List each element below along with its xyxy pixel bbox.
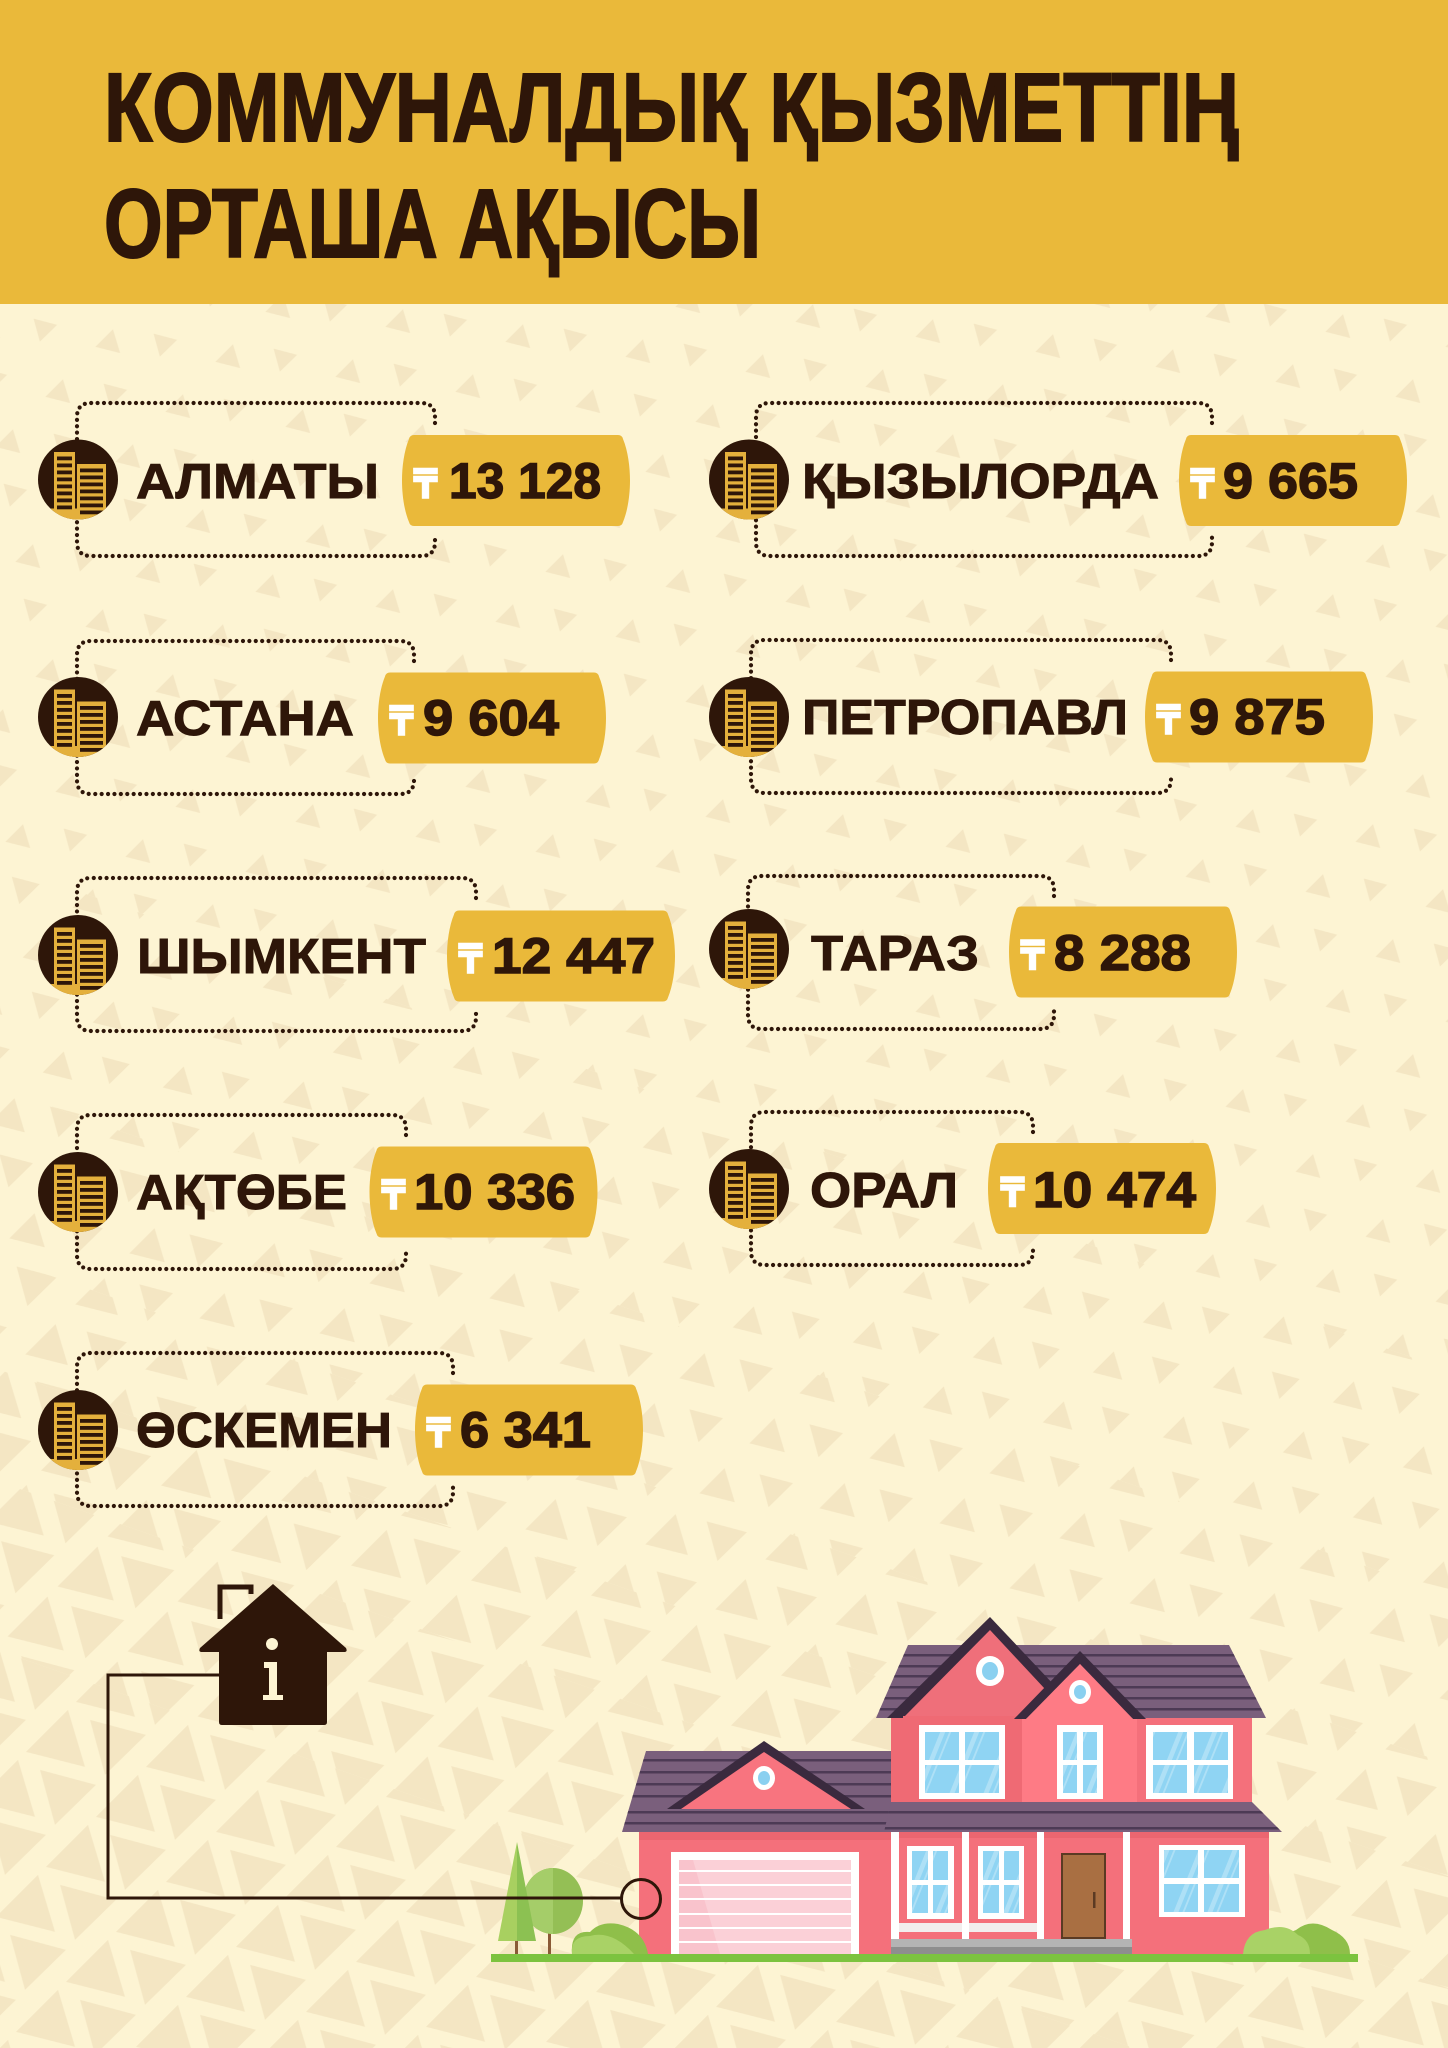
conifer tree: [498, 1842, 536, 1954]
dotted frame: [77, 641, 414, 794]
city name: ШЫМКЕНТ: [137, 930, 426, 984]
city name: ҚЫЗЫЛОРДА: [802, 455, 1159, 509]
tenge sign: ₸: [1020, 931, 1045, 980]
dotted frame: [77, 1115, 406, 1269]
value: 13 128: [449, 453, 601, 509]
row: Қызылорда: [709, 403, 1407, 556]
tenge sign: ₸: [1156, 696, 1181, 744]
icon: buildings: [709, 909, 789, 992]
dotted frame: [748, 876, 1054, 1029]
tenge sign: ₸: [413, 460, 438, 508]
round tree: [523, 1868, 583, 1954]
city name: АЛМАТЫ: [136, 455, 379, 509]
door: [1061, 1853, 1106, 1939]
illustration: house: [491, 1617, 1358, 1962]
value: 9 604: [423, 690, 559, 746]
ground: [491, 1954, 1358, 1962]
city name: ПЕТРОПАВЛ: [802, 691, 1128, 745]
tenge sign: ₸: [1000, 1168, 1025, 1217]
upper storey wall: [891, 1716, 1252, 1804]
value: 8 288: [1054, 925, 1191, 981]
value pill: [378, 672, 606, 764]
city name: АҚТӨБЕ: [136, 1166, 347, 1220]
row: Орал: [709, 1112, 1216, 1265]
round window: [1069, 1680, 1091, 1704]
dotted frame: [77, 1353, 453, 1506]
ground floor wall: [891, 1830, 1269, 1954]
dotted frame: [77, 878, 476, 1031]
value: 9 665: [1223, 453, 1358, 509]
garage wall: [639, 1830, 893, 1954]
round window: [753, 1766, 775, 1790]
title line 2: ОРТАША АҚЫСЫ: [104, 169, 761, 278]
right big window: [1159, 1845, 1245, 1917]
icon: buildings: [38, 1152, 118, 1234]
value: 10 336: [414, 1164, 575, 1220]
value pill: [447, 910, 675, 1002]
porch columns and rails: [891, 1832, 1130, 1940]
city name: ӨСКЕМЕН: [136, 1404, 392, 1458]
row: Шымкент: [38, 878, 675, 1031]
icon: buildings: [38, 440, 118, 522]
row: Астана: [38, 641, 606, 794]
row: Ақтөбе: [38, 1115, 598, 1269]
garage roof: [620, 1751, 895, 1832]
city name: ОРАЛ: [810, 1164, 958, 1218]
lower window 1: [907, 1846, 954, 1919]
value pill: [370, 1146, 598, 1238]
tenge sign: ₸: [426, 1408, 451, 1458]
value pill: [1145, 672, 1373, 762]
tenge sign: ₸: [381, 1170, 406, 1220]
value pill: [988, 1143, 1216, 1234]
right bush: [1243, 1924, 1350, 1954]
upper window 3: [1146, 1725, 1233, 1799]
row: Тараз: [709, 876, 1237, 1029]
header band: [0, 0, 1448, 304]
value: 12 447: [492, 928, 655, 984]
icon: buildings: [38, 677, 118, 760]
tenge sign: ₸: [389, 696, 414, 746]
connector line from info icon to house: [108, 1675, 622, 1898]
icon: info house: [199, 1584, 347, 1725]
icon: buildings: [38, 915, 118, 998]
row: Петропавл: [709, 640, 1373, 793]
value pill: [1179, 435, 1407, 526]
row: Өскемен: [38, 1353, 643, 1506]
dotted frame: [751, 640, 1171, 793]
porch roof: [880, 1802, 1290, 1832]
value pill: [1009, 906, 1237, 998]
upper window 2: [1057, 1725, 1103, 1799]
value pill: [402, 435, 630, 526]
garage gable: [667, 1741, 865, 1809]
garage door: [671, 1852, 859, 1954]
icon: buildings: [709, 440, 789, 522]
icon: buildings: [709, 677, 789, 760]
upper window 1: [919, 1725, 1005, 1799]
steps: [891, 1939, 1132, 1954]
left bush: [572, 1923, 648, 1954]
small gable: [1014, 1651, 1146, 1719]
icon: buildings: [38, 1390, 118, 1472]
tenge sign: ₸: [458, 934, 483, 984]
lower window 2: [978, 1846, 1024, 1919]
tenge sign: ₸: [1190, 460, 1215, 508]
dotted frame: [77, 403, 435, 556]
icon: buildings: [709, 1149, 789, 1232]
value: 6 341: [460, 1402, 591, 1458]
row: Алматы: [38, 403, 630, 556]
round window: [976, 1656, 1004, 1686]
value: 10 474: [1033, 1162, 1196, 1218]
main roof: [870, 1645, 1270, 1718]
pointer circle: [622, 1880, 660, 1918]
city name: АСТАНА: [136, 692, 354, 746]
value: 9 875: [1189, 689, 1325, 745]
large gable: [887, 1617, 1055, 1722]
dotted frame: [751, 1112, 1033, 1265]
value pill: [415, 1384, 643, 1476]
dotted frame: [756, 403, 1212, 556]
city name: ТАРАЗ: [811, 927, 979, 981]
